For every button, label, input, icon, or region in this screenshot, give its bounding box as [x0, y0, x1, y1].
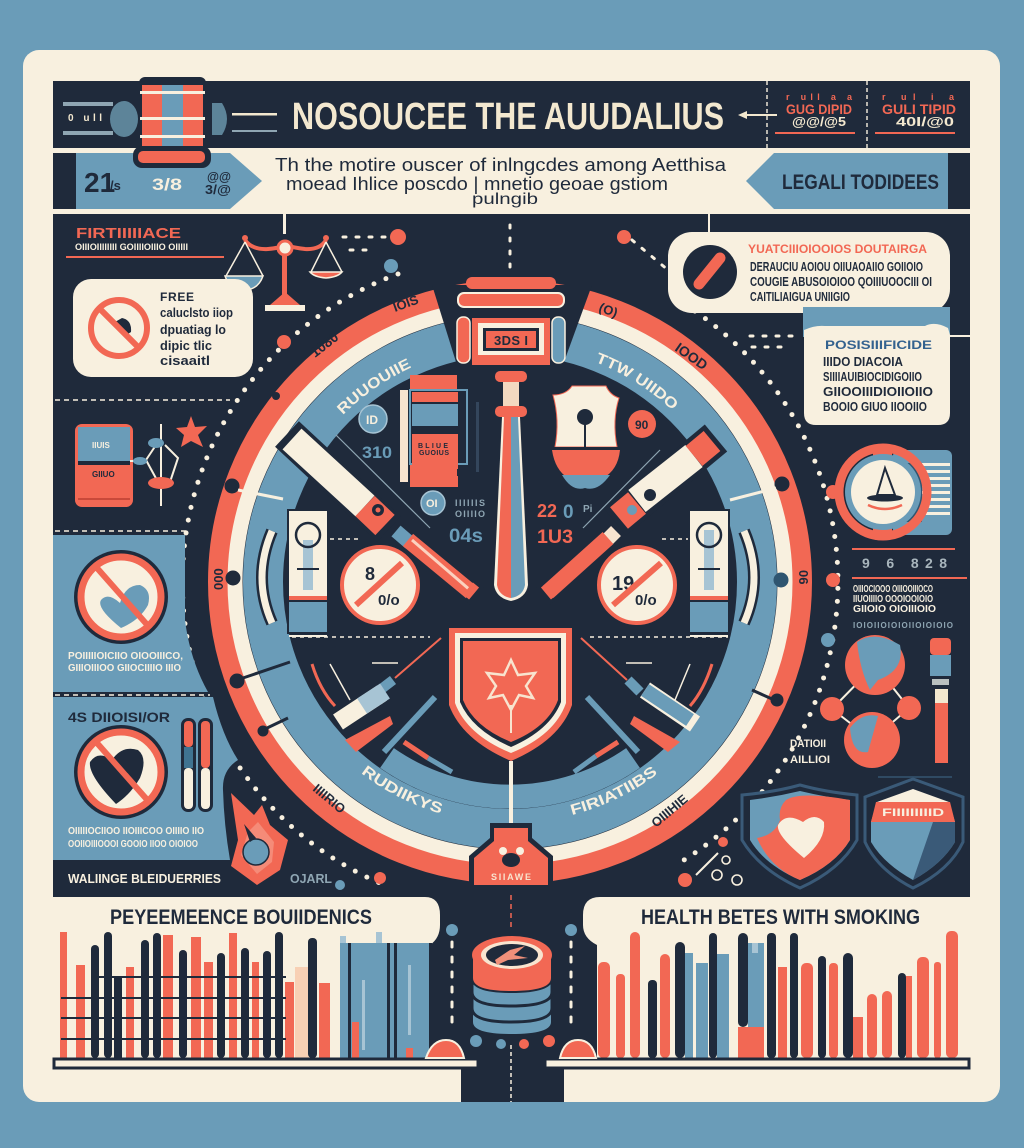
- gauge icon right: [826, 445, 952, 540]
- right hump: [560, 1040, 596, 1058]
- icon: prohibition sign: [91, 300, 147, 356]
- header stat right: [875, 92, 956, 134]
- card: right note: [803, 307, 950, 425]
- blue panel: heart: POIIIIIOICIIO OIOOIIICO,: [68, 651, 183, 662]
- card: prohibition: dipic tlic: [160, 338, 212, 353]
- small scissors icon: [678, 837, 742, 887]
- header stat left: GUG DIPID: [786, 101, 852, 117]
- ring labels: 000: [211, 568, 226, 590]
- cigarette packet: BLIUE: [418, 443, 448, 450]
- left arrow banner: 3/@: [205, 182, 231, 197]
- ring labels: [172, 252, 852, 870]
- small caption near flame: OJARL: [290, 871, 332, 886]
- ring labels: RUDIIKYS: [362, 765, 442, 812]
- header stat right: r ul i a: [882, 92, 955, 102]
- small stat badges: OIIIIO: [455, 509, 485, 519]
- top dotted accents: [272, 225, 970, 400]
- ring labels: OIIIHIE: [648, 791, 691, 830]
- bottle badge: SIIAWE: [491, 872, 531, 882]
- ring labels: (O): [597, 300, 620, 320]
- intro text block: [275, 155, 727, 208]
- arrow: [738, 111, 777, 119]
- card: warning top right: DERAUCIU AOIOU OIIUAOAIIO GOIIOIO: [750, 259, 923, 274]
- vial icon: [930, 638, 951, 763]
- left no-smoking sign: 8: [365, 564, 375, 584]
- card: prohibition: caluclsto iiop: [160, 305, 233, 320]
- coin stack: [472, 936, 552, 1035]
- left arrow banner: [53, 153, 262, 209]
- molecule diagram: DATIOII: [790, 738, 826, 750]
- card: prohibition: [73, 279, 253, 377]
- small stat badges: OI: [426, 498, 438, 510]
- blue panel: heart warning: [53, 697, 238, 860]
- right stat text: IIUOIIIIO OOOIOOIOIO: [853, 594, 933, 605]
- icon: crossed heart: [74, 550, 168, 644]
- packet and molecule icon: [75, 416, 207, 507]
- small stat badges: 90: [635, 418, 649, 432]
- right arrow banner: [746, 153, 970, 209]
- left hump: [426, 1040, 464, 1058]
- card: right note: BOOIO GIUO IIOOIIO: [823, 399, 927, 414]
- intro text block: pulngib: [472, 191, 538, 208]
- top wedge gap: [432, 285, 592, 362]
- icon: pill badge: [683, 245, 737, 299]
- ring labels: 06: [796, 570, 811, 584]
- right syringe: [581, 638, 712, 752]
- card: right note: GIIOOIIIDIOIIOIIO: [823, 384, 933, 399]
- central shield: [449, 628, 572, 761]
- dark main panel: [53, 214, 970, 897]
- right stat text: 9 6 828: [862, 555, 947, 571]
- divider ticks: [708, 214, 710, 234]
- blue panel: heart warning: OIIIIIOCIIOO IIOIIICOO OIIIIO IIO: [68, 826, 204, 837]
- cigarette packet: GUOIUS: [419, 450, 449, 457]
- small caption near flame: WALIINGE BLEIDUERRIES: [68, 871, 221, 886]
- right stat text: [821, 548, 967, 647]
- small caption near flame: [68, 871, 386, 890]
- header stat right: GULI TIPID: [882, 101, 956, 117]
- small stat badges: Pi: [583, 504, 593, 515]
- right no-smoking sign: 19: [612, 573, 634, 595]
- intro text block: moead Ihlice poscdo | mnetio geoae gstiom: [286, 174, 668, 194]
- left arrow banner: /s: [110, 178, 121, 193]
- small stat badges: [359, 405, 656, 548]
- bib badge: [552, 386, 620, 489]
- packet and molecule icon: GIIUO: [92, 470, 115, 479]
- small stat badges: 1U3: [537, 527, 573, 548]
- connector stem: [509, 761, 513, 823]
- baseline: [545, 1059, 969, 1068]
- card: right note: SIIIIAUIBIOCIDIGOIIO: [823, 369, 922, 384]
- center dark column: [425, 895, 600, 1102]
- bar chart: [598, 931, 958, 1058]
- right stat text: IOIOIIOIOIOIIOIOIOIO: [853, 621, 953, 630]
- ring pins: [226, 478, 788, 735]
- left arrow banner: 3/8: [152, 175, 182, 194]
- blue panel: heart warning: 4S DIIOISI/OR: [68, 709, 170, 725]
- title: NOSOUCEE THE AUUDALIUS: [292, 96, 724, 138]
- inner blue divider lines: [384, 697, 638, 752]
- ring labels: 1080: [307, 328, 342, 360]
- card: prohibition: cisaaitl: [160, 353, 210, 368]
- header stat left: @@/@5: [792, 114, 846, 129]
- ring labels: RUUOUIIE: [336, 358, 411, 414]
- small stat badges: ID: [366, 413, 378, 427]
- blue panel: heart warning: OOIIOIIIOOOI GOOIO IIOO OIOIOO: [68, 839, 198, 850]
- heading note top-left: OIIIOIIIIIIII GOIIIIOIIIO OIIIII: [75, 242, 188, 252]
- blue panel: heart: [53, 535, 208, 692]
- gavel: 3DS I: [494, 333, 528, 348]
- card: prohibition: FREE: [160, 290, 194, 304]
- small stat badges: 04s: [449, 526, 483, 547]
- baseline: [54, 1059, 478, 1068]
- intro text block: Th the motire ouscer of inlngcdes among Aetthisa: [275, 155, 727, 175]
- central ring: [218, 290, 802, 874]
- grid lines: [61, 976, 286, 1040]
- card: right note: IIIDO DIACOIA: [823, 354, 904, 369]
- header stat right: 40I/@0: [896, 114, 954, 129]
- heading: HEALTH BETES WITH SMOKING: [641, 906, 920, 929]
- ring labels: TTW UIIDO: [598, 352, 677, 408]
- right arrow banner: LEGALI TODIDEES: [782, 171, 939, 194]
- icon: dark heart prohibition: [74, 725, 168, 819]
- small stat badges: 310: [362, 443, 392, 462]
- small stat badges: 0: [563, 502, 574, 523]
- ring labels: IOOD: [672, 339, 711, 373]
- heading: PEYEEMEENCE BOUIIDENICS: [110, 906, 372, 929]
- molecule diagram: AILLIOI: [790, 754, 830, 766]
- packet and molecule icon: IIUIS: [92, 441, 110, 450]
- left arrow banner: @@: [207, 169, 231, 184]
- blue shield: [865, 776, 963, 888]
- bottom right panel: [545, 897, 1000, 1068]
- small stat badges: IIIIIIS: [455, 498, 485, 508]
- card: warning top right: CAITILIAIGUA UNIIGIO: [750, 289, 850, 304]
- blue shield: FIIIIIIIIID: [882, 807, 944, 819]
- ring labels: IIIIRIO: [310, 781, 348, 816]
- card: warning top right: YUATCIIIOIOOIOS DOUTAIRGA: [748, 242, 927, 256]
- heading note top-left: [66, 225, 224, 258]
- ring labels: IOIS: [391, 292, 421, 315]
- gavel: [457, 277, 565, 601]
- top gavel icon: [63, 77, 277, 168]
- top gavel icon: 0 ull: [68, 113, 102, 124]
- side devices: [262, 509, 754, 637]
- right no-smoking sign: [599, 547, 675, 623]
- right stat text: OIIIOCIOOO OIIIOOIIIOCO: [853, 584, 933, 595]
- small stat badges: 22: [537, 501, 557, 521]
- heading note top-left: FIRTIIIIIACE: [76, 225, 181, 242]
- dotted outer orbit: [182, 274, 838, 884]
- bottle badge: [469, 823, 553, 895]
- header stat left: [775, 92, 855, 134]
- card: warning top right: [668, 232, 950, 313]
- right cigarette: [543, 438, 716, 597]
- header band: [53, 81, 970, 148]
- bar chart: [60, 932, 432, 1058]
- scales icon: [225, 214, 342, 311]
- card: prohibition: dpuatiag lo: [160, 322, 226, 337]
- ring labels: FIRIATIIBS: [570, 767, 656, 815]
- divider dashes left: [55, 400, 230, 695]
- icon: flame: [231, 793, 288, 885]
- header stat left: r ull a a: [786, 92, 853, 102]
- left arrow banner: 21: [84, 167, 115, 198]
- card: warning top right: COUGIE ABUSOIOIOO QOIIIUOOCIII OI: [750, 274, 932, 289]
- right stat text: GIIOIO OIOIIIOIO: [853, 604, 936, 615]
- gauge bars: [181, 718, 213, 812]
- left no-smoking sign: [342, 547, 418, 623]
- left cigarette: [287, 434, 477, 597]
- inner arc strips: [404, 742, 618, 772]
- right no-smoking sign: 0/o: [635, 592, 657, 609]
- heart shield: [742, 785, 857, 888]
- bottom left panel: [23, 897, 478, 1068]
- molecule diagram: [790, 635, 921, 768]
- left no-smoking sign: 0/o: [378, 592, 400, 609]
- left syringe: [312, 638, 441, 752]
- blue panel: heart: GIIIOIIIOO GIIOCIIIIO IIIO: [68, 663, 181, 674]
- cigarette packet: [400, 375, 479, 487]
- card: right note: POSISIIIFICIDE: [825, 338, 932, 352]
